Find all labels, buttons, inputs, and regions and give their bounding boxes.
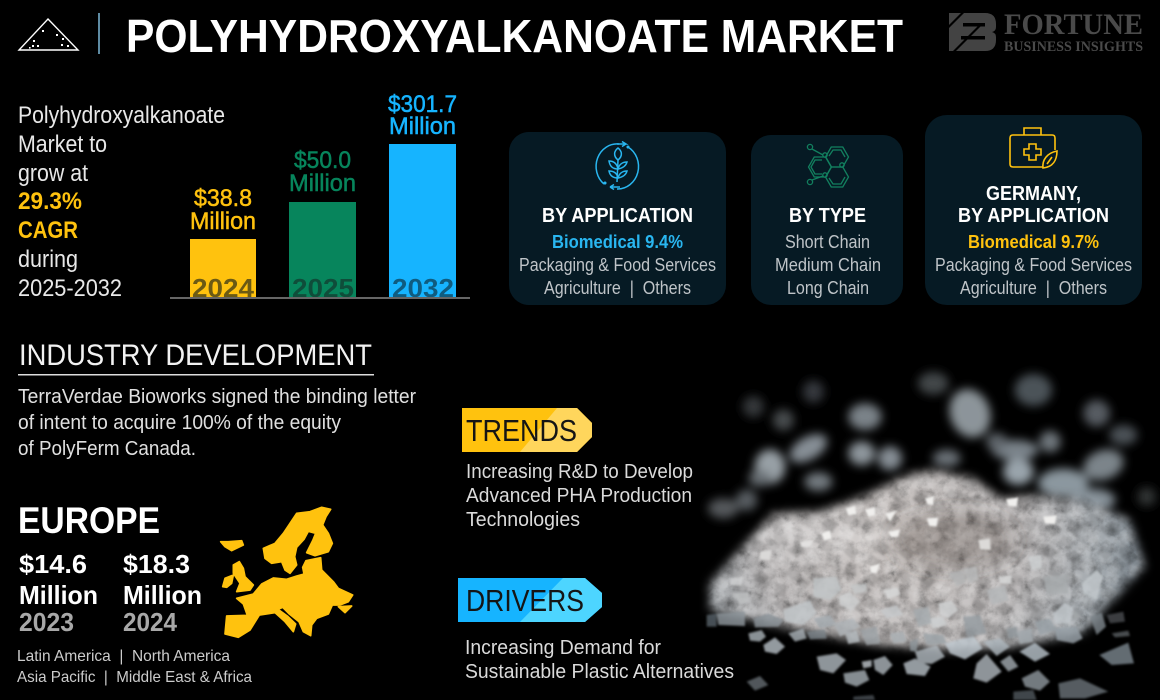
segment list: Packaging & Food Services bbox=[519, 255, 716, 275]
heading: GERMANY, bbox=[986, 183, 1081, 205]
driver text bbox=[465, 637, 734, 683]
panel: by type bbox=[751, 135, 903, 305]
divider bbox=[98, 13, 100, 54]
text block: CAGR summary: during bbox=[18, 246, 78, 273]
section: trends bbox=[462, 408, 693, 531]
heading: EUROPE bbox=[18, 500, 160, 541]
stat: 2023: 2023 bbox=[19, 607, 74, 637]
bar: 2025 bbox=[289, 147, 356, 303]
bar: 2032: $301.7 bbox=[388, 91, 457, 118]
stat: 2024 bbox=[123, 549, 202, 637]
header bbox=[19, 8, 1143, 62]
segment list: Agriculture | Others bbox=[960, 278, 1107, 298]
blurred background crystals bbox=[708, 372, 1156, 518]
other regions: Asia Pacific | Middle East & Africa bbox=[17, 669, 252, 686]
heading: BY APPLICATION bbox=[958, 205, 1109, 227]
icon: plant in circle bbox=[596, 142, 639, 190]
body text bbox=[18, 386, 416, 460]
logo: Fortune Business Insights: BUSINESS INSIGHTS bbox=[1004, 39, 1143, 55]
text block: CAGR summary: Market to bbox=[18, 131, 107, 158]
driver text: Sustainable Plastic Alternatives bbox=[465, 661, 734, 683]
text block: CAGR summary: 2025-2032 bbox=[18, 275, 122, 302]
tag: drivers: DRIVERS bbox=[466, 583, 584, 618]
bar: 2032 bbox=[388, 91, 457, 303]
bar: 2024: Million bbox=[190, 208, 256, 235]
heading: BY TYPE bbox=[789, 205, 866, 227]
trend text: Technologies bbox=[466, 509, 580, 531]
title: POLYHYDROXYALKANOATE MARKET bbox=[126, 10, 903, 62]
icon: molecule bbox=[807, 144, 848, 187]
panel: germany by application bbox=[925, 115, 1142, 305]
trend text: Increasing R&D to Develop bbox=[466, 461, 693, 483]
bar chart bbox=[170, 91, 470, 303]
tag: trends: TRENDS bbox=[466, 413, 577, 448]
bar: 2025: $50.0 bbox=[294, 147, 351, 174]
bar: 2024: 2024 bbox=[192, 273, 255, 303]
panel: by application bbox=[509, 132, 726, 305]
underline bbox=[18, 374, 374, 376]
section: drivers bbox=[458, 578, 734, 683]
stat: 2023 bbox=[19, 549, 98, 637]
stat: 2024: 2024 bbox=[123, 607, 178, 637]
logo mark bbox=[949, 13, 996, 51]
logo: Fortune Business Insights: FORTUNE bbox=[1004, 8, 1143, 41]
other regions bbox=[17, 648, 252, 686]
heading: BY APPLICATION bbox=[542, 205, 693, 227]
text block: CAGR summary: grow at bbox=[18, 160, 88, 187]
segment list: Agriculture | Others bbox=[544, 278, 691, 298]
other regions: Latin America | North America bbox=[17, 648, 230, 665]
section: industry development bbox=[18, 339, 416, 460]
body text: of PolyFerm Canada. bbox=[18, 438, 196, 460]
crystals bbox=[707, 555, 1134, 700]
driver text: Increasing Demand for bbox=[465, 637, 661, 659]
bar: 2025: 2025 bbox=[292, 273, 354, 303]
text block: CAGR summary: Polyhydroxyalkanoate bbox=[18, 102, 225, 129]
bar: 2032: Million bbox=[389, 113, 456, 140]
segment list bbox=[519, 255, 716, 298]
segment list bbox=[935, 255, 1132, 298]
body text: of intent to acquire 100% of the equity bbox=[18, 412, 341, 434]
segment list: Packaging & Food Services bbox=[935, 255, 1132, 275]
trend text bbox=[466, 461, 693, 531]
trend text: Advanced PHA Production bbox=[466, 485, 692, 507]
text block: CAGR summary: 29.3% bbox=[18, 188, 82, 215]
photo: crystal pile bbox=[680, 372, 1160, 700]
map of Europe bbox=[221, 507, 353, 637]
type list: Long Chain bbox=[787, 278, 869, 298]
bar: 2024: $38.8 bbox=[194, 185, 252, 212]
stat: 2023: Million bbox=[19, 580, 98, 610]
section: europe bbox=[17, 500, 353, 686]
text block: CAGR summary: CAGR bbox=[18, 217, 78, 244]
logo: Fortune Business Insights bbox=[949, 8, 1143, 55]
bar: 2024 bbox=[190, 185, 256, 303]
stat: 2024: $18.3 bbox=[123, 549, 190, 579]
stat: 2023: $14.6 bbox=[19, 549, 87, 579]
highlighted segment: Biomedical 9.7% bbox=[968, 232, 1099, 252]
bright facets bbox=[760, 496, 1057, 573]
stat: 2024: Million bbox=[123, 580, 202, 610]
body text: TerraVerdae Bioworks signed the binding letter bbox=[18, 386, 416, 408]
bar: 2025: Million bbox=[289, 170, 356, 197]
icon: medical case with leaf bbox=[1010, 128, 1057, 168]
axis bbox=[170, 297, 470, 299]
bar: 2032: 2032 bbox=[392, 273, 454, 303]
heading: INDUSTRY DEVELOPMENT bbox=[19, 339, 372, 372]
highlighted segment: Biomedical 9.4% bbox=[552, 232, 683, 252]
type list: Short Chain bbox=[785, 232, 870, 252]
type list: Medium Chain bbox=[775, 255, 881, 275]
icon: crystal pile triangle bbox=[19, 19, 78, 50]
text block: CAGR summary bbox=[18, 102, 225, 302]
crystal mound bbox=[702, 464, 1151, 658]
type list bbox=[775, 232, 881, 298]
heading bbox=[958, 183, 1109, 227]
